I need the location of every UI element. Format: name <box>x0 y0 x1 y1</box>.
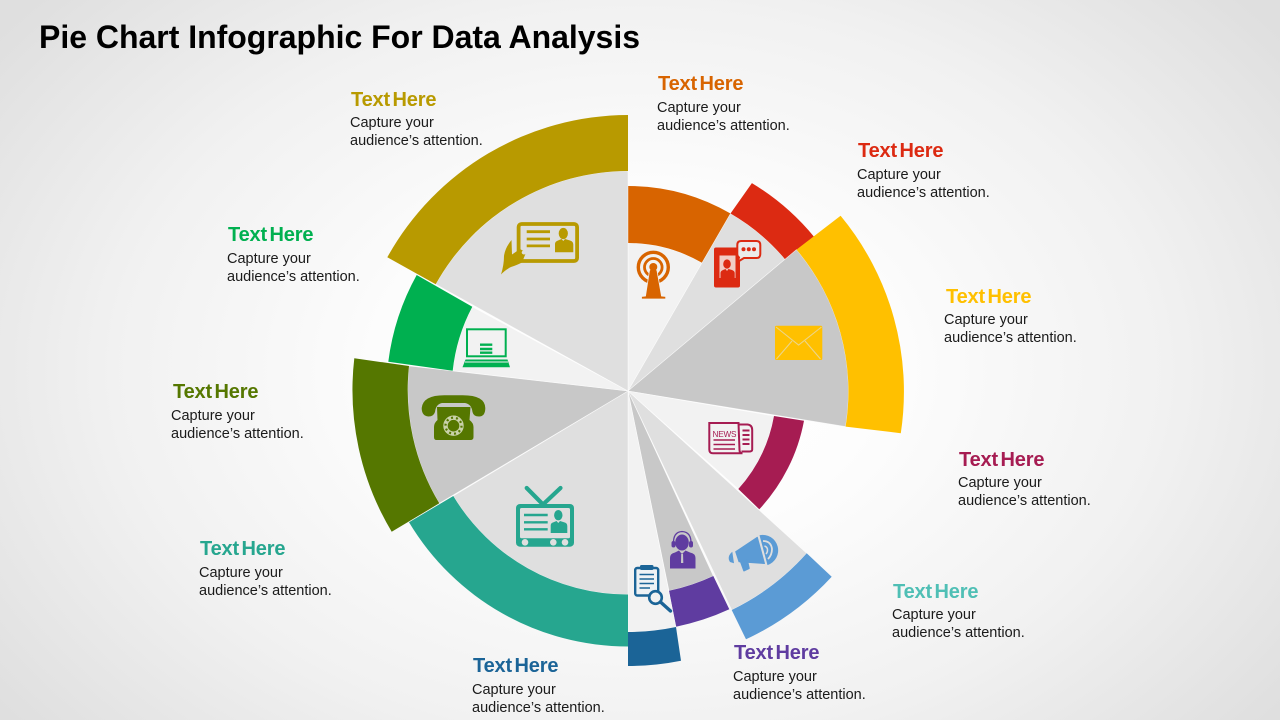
label: yellow <box>944 286 1077 346</box>
label: gold <box>350 89 483 149</box>
label: olive: Text Here <box>173 381 258 403</box>
wedge: magenta segment <box>628 391 804 509</box>
label: green: audience’s attention. <box>227 269 360 285</box>
label: gold: audience’s attention. <box>350 133 483 149</box>
icon: newspaper: NEWS <box>712 430 737 439</box>
icon: telephone <box>422 395 485 440</box>
label: light teal <box>892 581 1025 641</box>
title: Pie Chart Infographic For Data Analysis <box>39 19 640 55</box>
label: green <box>227 224 360 285</box>
icon: laptop <box>462 329 510 367</box>
label: magenta: audience’s attention. <box>958 493 1091 509</box>
label: green: Capture your <box>227 251 311 267</box>
icon: television <box>516 488 574 547</box>
wedge: green segment <box>388 275 628 391</box>
label: purple: audience’s attention. <box>733 687 866 703</box>
label: dark blue: Capture your <box>472 682 556 698</box>
icon: broadcast tower <box>638 252 668 299</box>
label: light teal: Text Here <box>893 581 978 603</box>
label: light teal: audience’s attention. <box>892 625 1025 641</box>
label: light teal: Capture your <box>892 607 976 623</box>
label: magenta: Capture your <box>958 475 1042 491</box>
icon: support agent <box>670 532 696 568</box>
wedge: purple segment <box>628 391 729 627</box>
wedge: olive segment <box>352 358 628 532</box>
label: gold: Capture your <box>350 115 434 131</box>
label: purple: Text Here <box>734 642 819 664</box>
icon: clipboard with magnifier <box>635 565 670 611</box>
label: purple: Capture your <box>733 669 817 685</box>
label: magenta <box>958 449 1091 509</box>
label: orange <box>657 73 790 134</box>
label: dark blue: audience’s attention. <box>472 700 605 716</box>
label: orange: Capture your <box>657 100 741 116</box>
label: yellow: Text Here <box>946 286 1031 308</box>
label: red <box>857 140 990 201</box>
label: olive: Capture your <box>171 408 255 424</box>
label: dark blue: Text Here <box>473 655 558 677</box>
label: olive: audience’s attention. <box>171 426 304 442</box>
label: red: audience’s attention. <box>857 185 990 201</box>
label: yellow: audience’s attention. <box>944 330 1077 346</box>
pie chart <box>352 115 904 666</box>
label: magenta: Text Here <box>959 449 1044 471</box>
icon: envelope <box>775 326 822 360</box>
icon: newspaper <box>709 423 752 453</box>
wedge: dark blue segment <box>628 391 681 666</box>
label: green: Text Here <box>228 224 313 246</box>
wedge: red segment <box>628 183 814 391</box>
label: teal: audience’s attention. <box>199 583 332 599</box>
label: red: Text Here <box>858 140 943 162</box>
label: orange: Text Here <box>658 73 743 95</box>
icon: tablet with chat bubble <box>714 241 760 288</box>
wedge: teal segment <box>409 391 628 646</box>
label: teal: Text Here <box>200 538 285 560</box>
label: gold: Text Here <box>351 89 436 111</box>
label: purple <box>733 642 866 703</box>
icon: megaphone <box>729 535 778 571</box>
label: yellow: Capture your <box>944 312 1028 328</box>
wedge: orange segment <box>628 186 730 391</box>
icon: presentation card in hand <box>501 224 577 274</box>
label: olive <box>171 381 304 442</box>
label: red: Capture your <box>857 167 941 183</box>
label: teal <box>199 538 332 599</box>
label: dark blue <box>472 655 605 716</box>
wedge: gold segment <box>387 115 628 391</box>
label: orange: audience’s attention. <box>657 118 790 134</box>
wedge: yellow segment <box>628 216 904 433</box>
wedge: light blue segment <box>628 391 832 639</box>
label: teal: Capture your <box>199 565 283 581</box>
